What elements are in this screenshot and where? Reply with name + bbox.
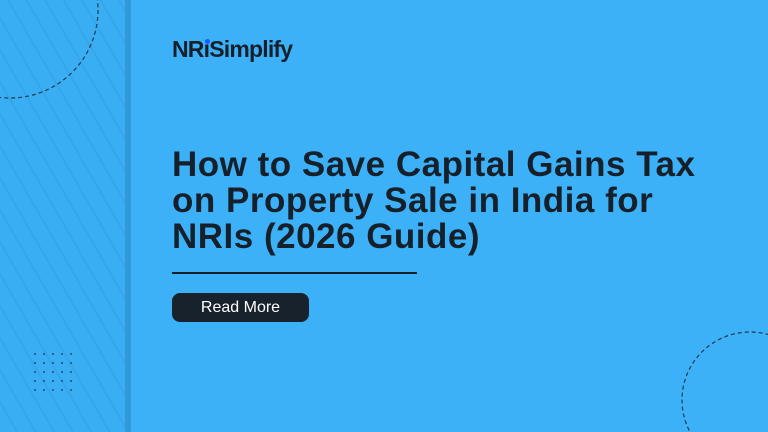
- underline: [172, 272, 417, 274]
- logo: NRiSimplify: [172, 36, 292, 62]
- title: NRIs (2026 Guide): [172, 217, 480, 256]
- title: [172, 145, 695, 256]
- button: read more: [172, 293, 309, 322]
- button: read more: Read More: [201, 299, 280, 316]
- title: How to Save Capital Gains Tax: [172, 145, 695, 184]
- vertical divider: [125, 0, 131, 432]
- title: on Property Sale in India for: [172, 181, 653, 220]
- left patterned strip: [0, 0, 125, 432]
